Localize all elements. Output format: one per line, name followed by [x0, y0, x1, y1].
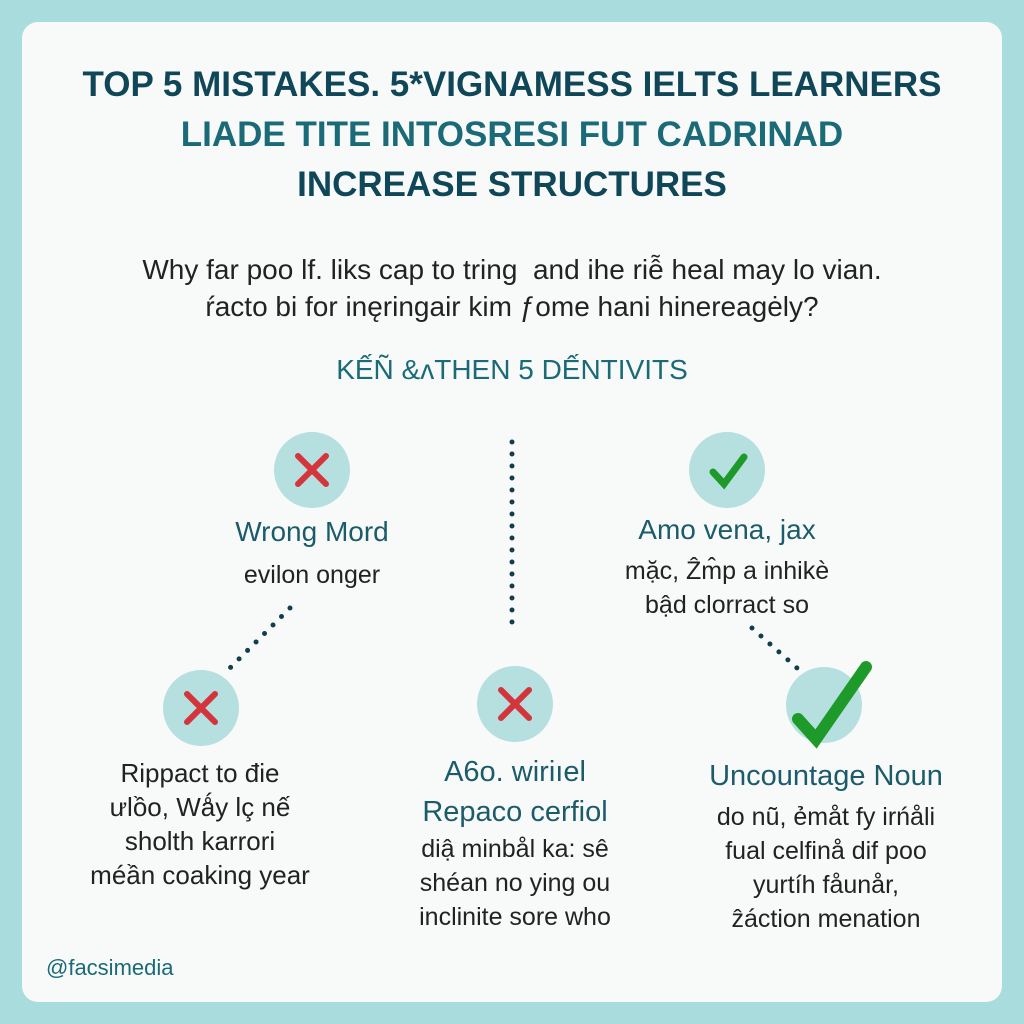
item 4: Repaco cerfiol: [422, 796, 608, 828]
item 5: uncountable noun: do nũ, ẻmåt fy irńåli: [717, 803, 935, 831]
item 3: [90, 670, 310, 890]
handle: @facsimedia: [46, 955, 174, 980]
item 5: uncountable noun: ẑáction menation: [731, 905, 920, 933]
subtitle: Why far poo lf. liks cap to tring and ihe riễ heal may lo vian.: [142, 254, 882, 285]
item 2: correct: mặc, Ẑm̂p a inhikè: [625, 557, 829, 585]
title: INCREASE STRUCTURES: [297, 165, 727, 204]
section heading: KẾÑ &ʌTHEN 5 DẾNTIVITS: [336, 354, 688, 385]
item 5: uncountable noun: fual celfinå dif poo: [725, 837, 927, 865]
subtitle: ŕacto bi for inęringair kim ƒome hani hinereagėly?: [205, 291, 819, 322]
icon: red cross: [274, 432, 350, 508]
item 2: correct: Amo vena, jax: [638, 514, 816, 545]
item 4: [419, 666, 611, 931]
item 3: sholth karrori: [125, 826, 275, 856]
icon: green check: [689, 432, 765, 508]
item 5: uncountable noun: [709, 661, 943, 933]
item 4: shéan no ying ou: [420, 869, 610, 897]
title: LIADE TITE INTOSRESI FUT CADRINAD: [181, 115, 843, 154]
item 4: A6o. wiriıel: [444, 756, 586, 788]
item 4: diậ minbål ka: sê: [421, 835, 609, 863]
item 5: uncountable noun: Uncountage Noun: [709, 760, 943, 792]
subtitle: [142, 254, 882, 322]
item 3: Rippact to đie: [120, 758, 279, 788]
item 3: méần coaking year: [90, 860, 310, 890]
item 5: uncountable noun: yurtíh fåunår,: [753, 871, 899, 899]
item 4: inclinite sore who: [419, 903, 611, 931]
item 2: correct: bậd clorract so: [645, 591, 809, 619]
item 2: correct: [625, 432, 829, 619]
item 3: ưlồo, Wǻy lç nế: [110, 792, 290, 822]
item 1: wrong word: Wrong Mord: [235, 516, 389, 547]
item 1: wrong word: evilon onger: [244, 561, 380, 589]
icon: red cross: [163, 670, 239, 746]
title: [82, 65, 941, 204]
icon: red cross: [477, 666, 553, 742]
item 1: wrong word: [235, 432, 389, 589]
title: TOP 5 MISTAKES. 5*VIGNAMESS IELTS LEARNERS: [83, 65, 941, 104]
icon: big green check: [786, 667, 862, 743]
